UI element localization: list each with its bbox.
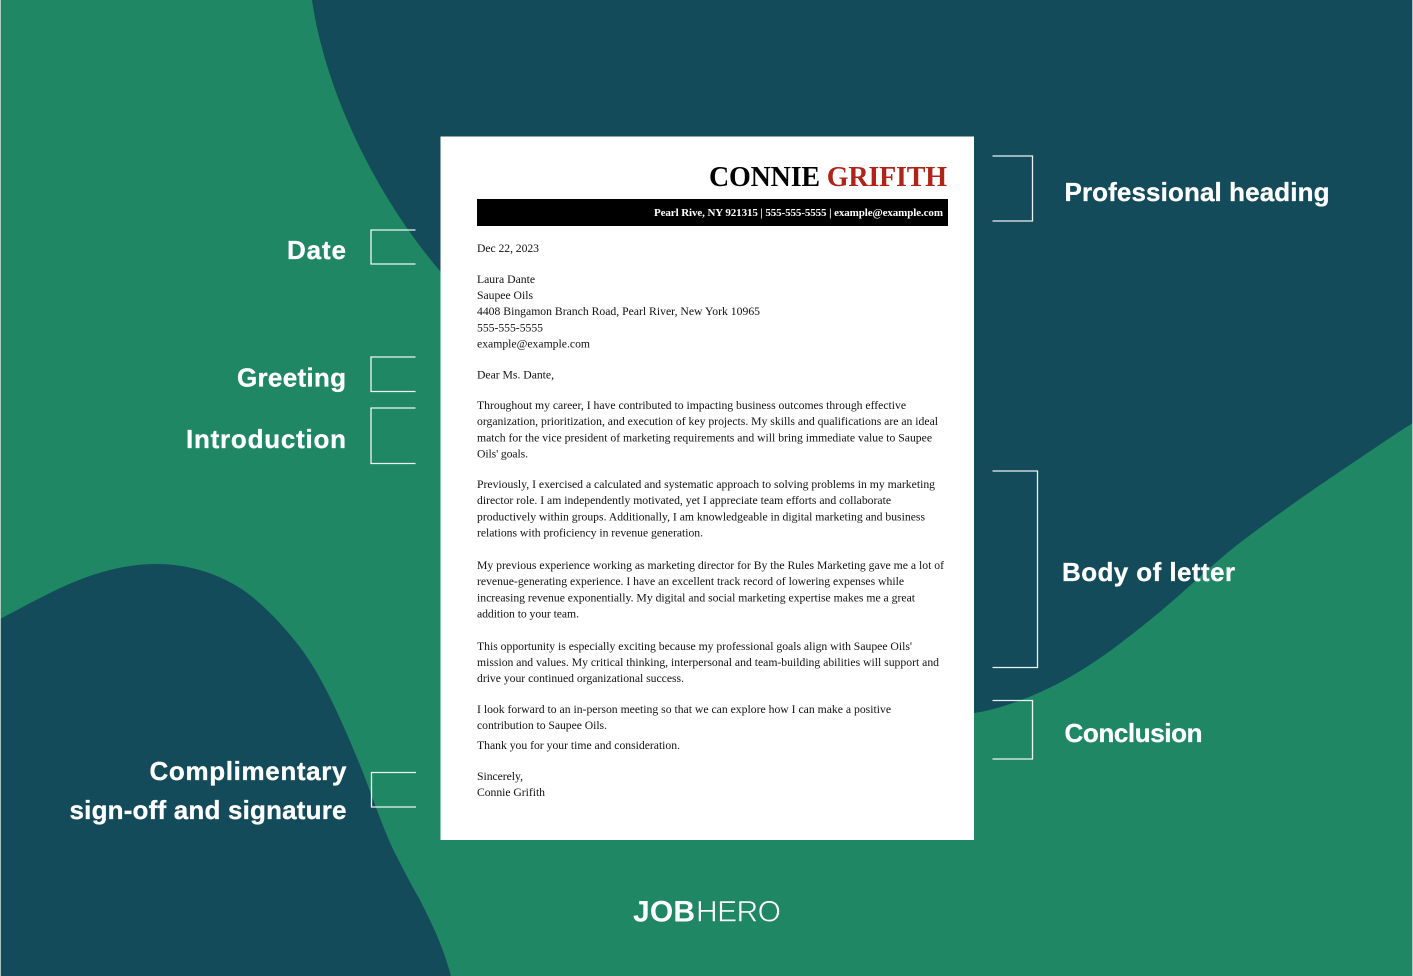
letter paper <box>440 136 974 840</box>
introduction paragraph: organization, prioritization, and execution of key projects. My skills and qualifications are an ideal <box>477 415 939 428</box>
label: Complimentary sign-off and signature: Complimentary <box>150 756 347 786</box>
contact bar <box>477 199 948 226</box>
bracket: Introduction <box>371 408 416 464</box>
bracket: Professional heading <box>992 156 1032 221</box>
sign-off and signature: Sincerely, <box>477 770 523 783</box>
body paragraph 2: revenue-generating experience. I have an excellent track record of lowering expenses while <box>477 575 904 588</box>
recipient address block: Saupee Oils <box>477 289 533 302</box>
logo: JobHero: HERO <box>696 896 781 928</box>
introduction paragraph: Throughout my career, I have contributed to impacting business outcomes through effective <box>477 399 906 412</box>
label: Complimentary sign-off and signature <box>70 756 347 825</box>
sign-off and signature: Connie Grifith <box>477 786 545 799</box>
conclusion paragraph <box>477 703 891 752</box>
body paragraph 1: director role. I am independently motivated, yet I appreciate team efforts and collaborate <box>477 494 891 507</box>
label: Greeting: Greeting <box>237 362 346 392</box>
recipient address block <box>477 273 760 350</box>
letter name heading: CONNIE GRIFITH <box>709 162 947 193</box>
label: Professional heading: Professional heading <box>1064 177 1330 207</box>
body paragraph 3: drive your continued organizational success. <box>477 672 684 685</box>
recipient address block: Laura Dante <box>477 273 535 286</box>
body paragraph 1: Previously, I exercised a calculated and systematic approach to solving problems in my marketing <box>477 478 935 491</box>
body paragraph 2: addition to your team. <box>477 608 579 620</box>
label: Introduction: Introduction <box>186 424 346 454</box>
recipient address block: 555-555-5555 <box>477 322 543 334</box>
body paragraph 1: relations with proficiency in revenue generation. <box>477 526 703 540</box>
introduction paragraph: match for the vice president of marketing requirements and will bring immediate value to Saupee <box>477 432 932 444</box>
body paragraph 3: This opportunity is especially exciting because my professional goals align with Saupee Oils' <box>477 640 912 653</box>
bracket: Greeting <box>371 357 416 392</box>
body paragraph 1: productively within groups. Additionally, I am knowledgeable in digital marketing and business <box>477 510 925 524</box>
label: Conclusion: Conclusion <box>1064 718 1202 748</box>
conclusion paragraph: I look forward to an in-person meeting so that we can explore how I can make a positive <box>477 703 891 716</box>
contact bar: Pearl Rive, NY 921315 | 555-555-5555 | example@example.com <box>654 207 943 219</box>
conclusion paragraph: contribution to Saupee Oils. <box>477 719 607 732</box>
introduction paragraph <box>477 399 939 460</box>
body paragraph 3: mission and values. My critical thinking, interpersonal and team-building abilities will support and <box>477 656 939 669</box>
sign-off and signature <box>477 770 545 799</box>
label: Body of letter: Body of letter <box>1062 557 1235 587</box>
conclusion paragraph: Thank you for your time and consideration. <box>477 739 680 752</box>
letter greeting: Dear Ms. Dante, <box>477 368 554 382</box>
background: dark blob bottom left <box>0 564 451 976</box>
bracket: Body of letter <box>992 471 1038 668</box>
logo: JobHero <box>633 896 781 928</box>
bracket: Date <box>371 230 416 264</box>
recipient address block: 4408 Bingamon Branch Road, Pearl River, New York 10965 <box>477 305 760 318</box>
letter date: Dec 22, 2023 <box>477 242 539 255</box>
label: Complimentary sign-off and signature: sign-off and signature <box>70 795 346 825</box>
body paragraph 1 <box>477 478 935 540</box>
body paragraph 2: increasing revenue exponentially. My digital and social marketing expertise makes me a great <box>477 592 916 604</box>
body paragraph 2: My previous experience working as marketing director for By the Rules Marketing gave me a lot of <box>477 559 944 572</box>
body paragraph 2 <box>477 559 944 620</box>
logo: JobHero: JOB <box>633 896 695 928</box>
bracket: Conclusion <box>992 700 1032 759</box>
recipient address block: example@example.com <box>477 338 590 350</box>
background: dark blob top right <box>312 0 1413 713</box>
body paragraph 3 <box>477 640 939 685</box>
label: Date: Date <box>287 235 346 265</box>
introduction paragraph: Oils' goals. <box>477 448 528 460</box>
bracket: sign-off <box>372 772 416 807</box>
